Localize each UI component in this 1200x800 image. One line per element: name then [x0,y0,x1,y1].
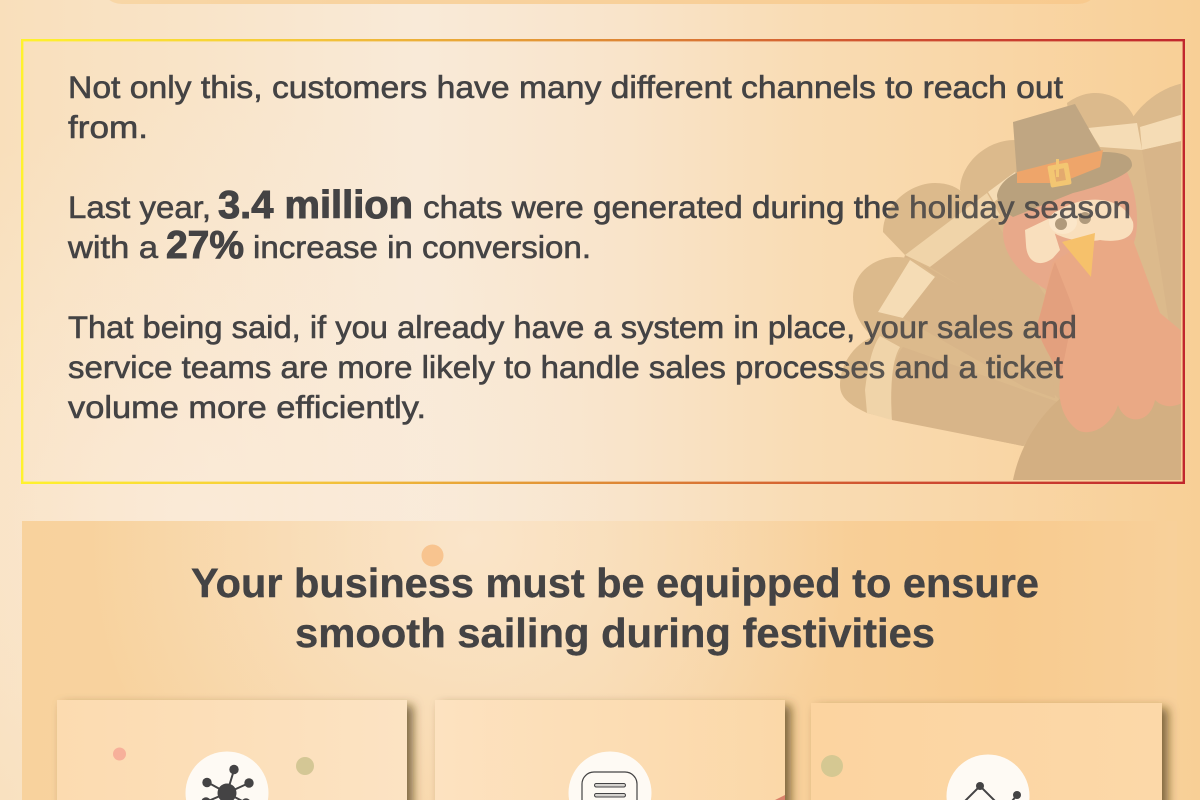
neck and wattle [1037,240,1184,432]
paragraph 2 with statistics: increase in conversion. [253,229,591,265]
turkey tint over text [840,82,1190,480]
paragraph 1: from. [68,109,148,145]
heading: smooth sailing during festivities [295,610,935,656]
panel: be equipped [22,521,1177,800]
back feathers [1134,84,1181,148]
paragraph 2 with statistics: 3.4 million [218,184,413,227]
heading: Your business must be equipped to ensure [191,560,1039,606]
paragraph 2 with statistics: 27% [166,224,244,267]
panel: channels statistics [22,40,1190,483]
icon: document list [568,752,652,800]
illustration: pilgrim turkey [840,82,1190,480]
card 1 [57,700,407,800]
hat brim [997,152,1132,217]
paragraph 3: volume more efficiently. [68,389,426,425]
top section pill [100,0,1100,4]
hat band [1017,150,1103,183]
icon: network hub [186,752,268,800]
body [1013,397,1190,480]
card 2 [435,700,785,800]
paragraph 1 [68,69,1063,145]
dot: pink [113,748,126,760]
icon: line chart [946,754,1030,800]
buckle [1047,159,1072,188]
paragraph 2 with statistics: chats were generated during the holiday season [423,189,1131,225]
paragraph 1: Not only this, customers have many different channels to reach out [68,69,1063,105]
gradient border [22,40,1184,483]
beak [1062,233,1095,277]
paragraph 3: That being said, if you already have a system in place, your sales and [68,309,1077,345]
paragraph 2 with statistics [67,184,1131,267]
head [1003,172,1137,290]
decorative red mark [775,795,785,800]
paragraph 2 with statistics: Last year, [68,189,211,225]
paragraph 2 with statistics: with a [67,229,159,265]
heading [191,560,1039,656]
dot: olive [821,755,843,777]
dot: olive [296,757,314,775]
paragraph 3 [68,309,1077,425]
face [1025,218,1060,263]
hat crown [1013,104,1102,176]
decorative dot [422,544,444,566]
card 3 [811,703,1162,800]
paragraph 3: service teams are more likely to handle sales processes and a ticket [68,349,1063,385]
